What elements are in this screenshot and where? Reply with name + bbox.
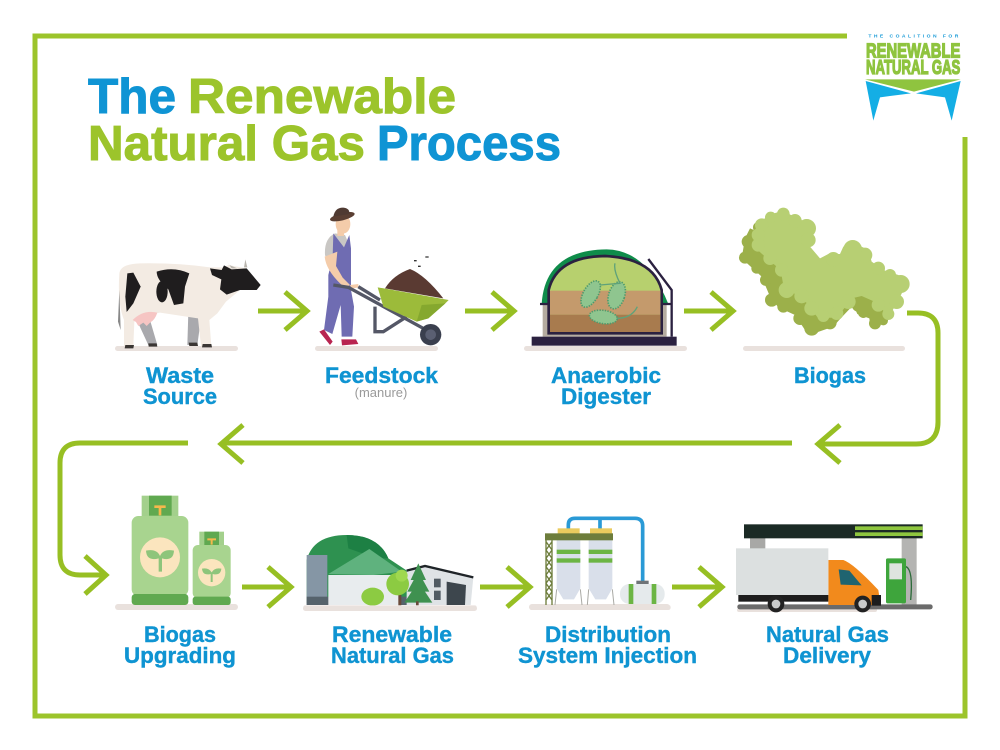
- label: Feedstock (manure): Feedstock: [325, 363, 439, 388]
- label: Waste Source: [143, 363, 217, 409]
- icon: distribution silos and tank: [529, 518, 671, 610]
- label: Distribution System Injection: Distribution: [545, 622, 671, 647]
- icon: farmer with wheelbarrow: [319, 208, 449, 345]
- label: Waste Source: Waste: [146, 363, 214, 388]
- label: Anaerobic Digester: Digester: [561, 384, 651, 409]
- label: Distribution System Injection: [518, 622, 697, 668]
- arrow: waste source to feedstock: [258, 292, 307, 330]
- title: Renewable: [188, 70, 456, 124]
- ground lines: [115, 346, 905, 612]
- logo: RENEWABLE: [866, 40, 960, 62]
- label: Biogas: Biogas: [794, 363, 866, 388]
- label: Anaerobic Digester: Anaerobic: [551, 363, 661, 388]
- icon: biogas cloud: [739, 208, 910, 336]
- arrow: middle return line: [221, 425, 792, 463]
- title: Natural Gas: [88, 117, 365, 171]
- title: The: [88, 70, 176, 124]
- icon: cow: [118, 258, 261, 348]
- arrow: feedstock to digester: [465, 292, 514, 330]
- label: Renewable Natural Gas: Renewable: [332, 622, 452, 647]
- icon: gas cylinders: [132, 496, 231, 605]
- label: Biogas Upgrading: Biogas: [144, 622, 216, 647]
- arrow: digester to biogas: [684, 292, 733, 330]
- logo: THE COALITION FOR: [868, 33, 959, 39]
- title: Process: [377, 117, 561, 171]
- icon: truck at gas station: [736, 524, 933, 612]
- label: Distribution System Injection: System Injection: [518, 643, 697, 668]
- icon: anaerobic digester: [532, 249, 677, 346]
- icon: renewable natural gas plant: [303, 535, 477, 610]
- label: Renewable Natural Gas: [331, 622, 454, 668]
- label: Feedstock (manure): [325, 363, 439, 400]
- title: [88, 70, 561, 171]
- label: Natural Gas Delivery: Natural Gas: [766, 622, 889, 647]
- arrow: renewable natural gas to injection: [480, 567, 530, 607]
- logo: [865, 33, 961, 121]
- arrow: upgrading to renewable natural gas: [242, 567, 291, 607]
- arrow: biogas to return line: [818, 313, 938, 463]
- arrow: injection to delivery: [672, 567, 722, 607]
- label: Natural Gas Delivery: Delivery: [783, 643, 872, 668]
- label: Anaerobic Digester: [551, 363, 661, 409]
- label: Biogas Upgrading: [124, 622, 236, 668]
- arrow: return line to biogas upgrading: [60, 443, 188, 594]
- label: Waste Source: Source: [143, 384, 217, 409]
- label: Biogas Upgrading: Upgrading: [124, 643, 236, 668]
- label: Feedstock (manure): (manure): [355, 385, 407, 400]
- label: Renewable Natural Gas: Natural Gas: [331, 643, 454, 668]
- label: Natural Gas Delivery: [766, 622, 889, 668]
